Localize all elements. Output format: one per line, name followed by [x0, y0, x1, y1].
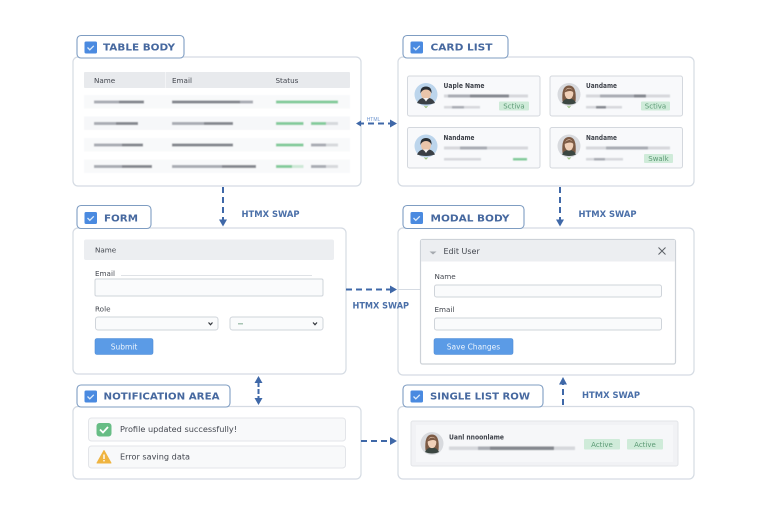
card 1	[408, 76, 540, 116]
panel: table body	[73, 36, 361, 186]
panel: card list	[398, 36, 694, 186]
table header row: Status	[276, 76, 299, 85]
label: htmx swap: HTMX SWAP	[242, 210, 300, 220]
status badge	[584, 439, 620, 450]
submit button	[95, 338, 153, 354]
tab: notification area heading	[77, 385, 230, 407]
tab: form heading	[77, 206, 151, 228]
icon: warning triangle	[97, 450, 111, 463]
tab: modal body heading: MODAL BODY	[430, 214, 510, 224]
status badge	[627, 439, 663, 450]
table row 3	[84, 138, 350, 152]
tab: card list heading: CARD LIST	[430, 42, 493, 54]
save changes button: Save Changes	[447, 342, 500, 352]
email field	[95, 269, 323, 296]
card 4: Swalk	[648, 155, 670, 163]
arrow: form and notification area two-way	[254, 376, 262, 405]
card 4: Nandame	[586, 134, 617, 142]
list row: Uanl nnoonlame	[449, 434, 504, 442]
icon: success check	[96, 423, 112, 436]
card 2	[550, 76, 682, 116]
arrow: table body to card list	[356, 117, 397, 128]
card 2: Uandame	[586, 82, 617, 90]
label: htmx swap: HTMX SWAP	[582, 391, 640, 401]
avatar	[414, 134, 438, 159]
table header row: Name	[94, 76, 116, 85]
card 1: Uaple Name	[444, 82, 485, 90]
arrow: notification area to single list row	[361, 437, 397, 445]
table header row: Email	[172, 76, 192, 85]
tab: card list heading	[403, 36, 508, 58]
panel: modal body	[398, 206, 694, 375]
error alert	[88, 446, 346, 468]
modal dialog: Name	[434, 272, 456, 281]
tab: table body heading: TABLE BODY	[103, 42, 176, 54]
panel: form	[73, 206, 346, 374]
arrow: form to modal body	[346, 286, 397, 294]
modal dialog: Edit User	[444, 247, 480, 256]
table row 1	[84, 95, 350, 108]
error alert: Error saving data	[120, 452, 190, 462]
tab: modal body heading	[403, 206, 524, 228]
role selects: Role	[95, 304, 111, 314]
arrow: single list row to modal body	[559, 377, 567, 405]
card 1: Sctiva	[503, 102, 525, 110]
role selects	[95, 304, 323, 330]
tab: table body heading	[77, 36, 184, 58]
arrow: table body to form	[219, 187, 227, 226]
avatar	[558, 134, 580, 159]
card 3: Nandame	[444, 134, 475, 142]
name field bar: Name	[95, 246, 117, 254]
success alert	[88, 418, 346, 441]
modal dialog	[420, 240, 676, 364]
table row 2	[84, 116, 350, 130]
avatar	[414, 83, 438, 108]
modal dialog: Email	[434, 305, 454, 314]
panel: single list row	[398, 385, 694, 479]
tab: single list row heading: SINGLE LIST ROW	[430, 392, 530, 402]
table header row	[84, 72, 350, 88]
card 3	[408, 128, 540, 168]
list row	[411, 421, 678, 466]
save changes button	[434, 338, 513, 354]
panel: notification area	[73, 385, 361, 479]
label: htmx swap: HTMX SWAP	[352, 302, 409, 312]
submit button: Submit	[111, 342, 137, 352]
name field bar	[84, 240, 334, 260]
tab: single list row heading	[403, 385, 543, 407]
arrow: table body to card list: HTML	[367, 117, 381, 123]
tab: form heading: FORM	[104, 214, 138, 224]
table row 4	[84, 160, 350, 173]
success alert: Profile updated successfully!	[120, 425, 237, 434]
status badge: Active	[591, 441, 613, 449]
email field: Email	[95, 269, 115, 278]
label: htmx swap: HTMX SWAP	[578, 210, 636, 220]
tab: notification area heading: NOTIFICATION AREA	[104, 392, 220, 402]
status badge: Active	[634, 441, 656, 449]
card 4	[550, 128, 682, 168]
avatar	[420, 432, 444, 455]
arrow: card list to modal body	[556, 187, 564, 226]
card 2: Sctiva	[645, 102, 666, 110]
avatar	[558, 83, 580, 108]
